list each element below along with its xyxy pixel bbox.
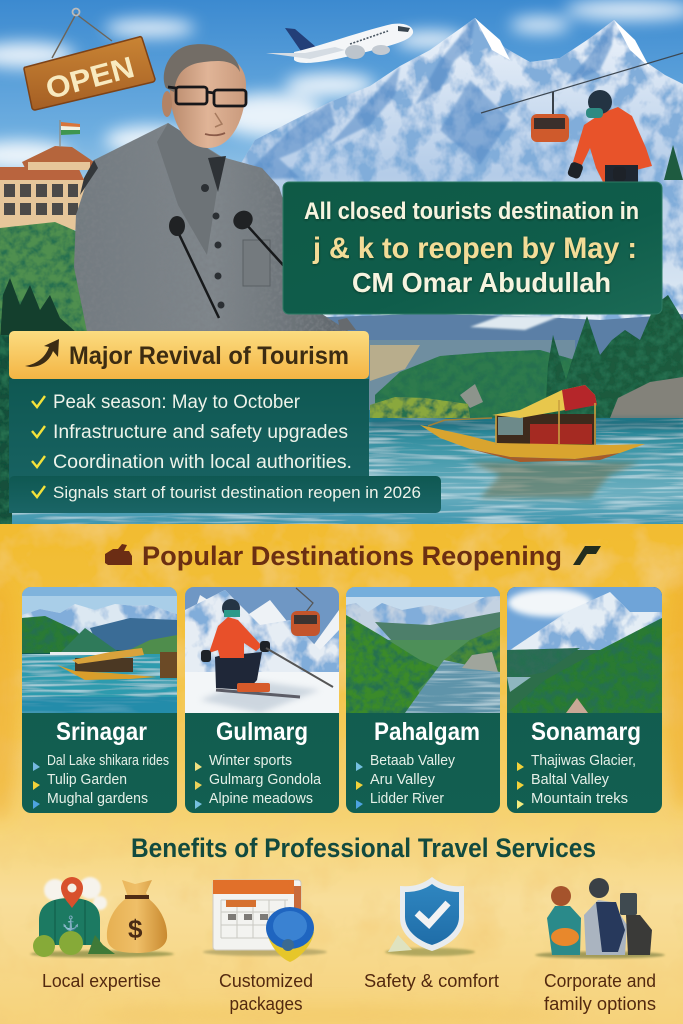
card: Srinagar: Srinagar bbox=[56, 718, 147, 746]
card: Sonamarg: Sonamarg bbox=[531, 718, 641, 746]
card: Srinagar bbox=[22, 587, 177, 813]
revival header bbox=[9, 331, 369, 379]
mountains bbox=[229, 18, 683, 330]
hero photo background bbox=[0, 0, 683, 524]
card: Sonamarg bbox=[507, 587, 662, 813]
microphones bbox=[169, 207, 322, 318]
lake bbox=[0, 418, 683, 524]
revival header: Major Revival of Tourism bbox=[69, 342, 349, 370]
card: Srinagar: Mughal gardens bbox=[47, 790, 148, 807]
card: Gulmarg: Winter sports bbox=[209, 752, 292, 769]
title text: CM Omar Abudullah bbox=[352, 267, 611, 298]
clouds bbox=[0, 0, 683, 169]
benefit: local expertise: Local expertise bbox=[42, 971, 161, 991]
speaker: man at podium bbox=[74, 44, 356, 332]
distant hills bbox=[300, 314, 683, 360]
benefit: corporate and family: Corporate and bbox=[544, 971, 656, 991]
title text: j & k to reopen by May : bbox=[312, 232, 637, 265]
skier bbox=[567, 90, 652, 182]
icon: rising arrow bbox=[25, 339, 59, 367]
icon: bags and pin: $ bbox=[128, 914, 143, 944]
sign text: OPEN bbox=[42, 51, 138, 106]
skier bbox=[201, 599, 333, 697]
shikara boat bbox=[420, 385, 645, 462]
card: Pahalgam: Aru Valley bbox=[370, 771, 435, 788]
tree bbox=[664, 145, 683, 180]
icon: calendar and badge bbox=[203, 880, 327, 962]
heading: benefits: Benefits of Professional Travel Services bbox=[131, 833, 596, 863]
card: Pahalgam bbox=[346, 587, 500, 813]
checklist: Signals start of tourist destination reopen in 2026 bbox=[53, 483, 421, 502]
card: Pahalgam: Lidder River bbox=[370, 790, 444, 807]
glasses bbox=[168, 87, 246, 106]
benefit: customized packages: packages bbox=[230, 994, 302, 1014]
left hillside forest bbox=[0, 222, 90, 524]
valley hillside bbox=[369, 340, 575, 410]
icon: shield bbox=[385, 877, 475, 956]
rock bbox=[610, 377, 683, 418]
card: Sonamarg: Baltal Valley bbox=[531, 771, 609, 788]
boat bbox=[57, 648, 177, 680]
title text: All closed tourists destination in bbox=[304, 198, 639, 225]
panel: major revival of tourism bbox=[9, 331, 441, 513]
card: Pahalgam: Betaab Valley bbox=[370, 752, 455, 769]
card: Sonamarg: Thajiwas Glacier, bbox=[531, 752, 636, 769]
open sign bbox=[24, 8, 155, 110]
checklist: Peak season: May to October bbox=[53, 392, 301, 413]
checklist: Coordination with local authorities. bbox=[53, 452, 352, 473]
benefit: customized packages: Customized bbox=[219, 971, 313, 991]
card: Srinagar: Dal Lake shikara rides bbox=[47, 752, 169, 769]
benefit: corporate and family: family options bbox=[544, 994, 656, 1014]
panel: yellow lower background bbox=[0, 524, 683, 1024]
sky bbox=[0, 0, 683, 240]
checklist: Infrastructure and safety upgrades bbox=[53, 422, 348, 443]
right forest bbox=[545, 295, 683, 418]
card: Srinagar: Tulip Garden bbox=[47, 771, 127, 788]
benefit: customized packages bbox=[203, 880, 327, 1014]
title panel bbox=[283, 182, 662, 314]
card: Gulmarg: Alpine meadows bbox=[209, 790, 313, 807]
card: Gulmarg: Gulmarg bbox=[216, 718, 308, 746]
benefit: safety and comfort bbox=[364, 877, 499, 991]
airplane bbox=[266, 24, 413, 63]
icon: luggage bbox=[105, 544, 132, 565]
icon: bags and pin: ⚓ bbox=[62, 915, 79, 932]
gondola bbox=[291, 588, 320, 636]
heading: popular destinations: Popular Destinations Reopening bbox=[142, 541, 562, 571]
card: Sonamarg: Mountain treks bbox=[531, 790, 628, 807]
shoreline flowers bbox=[370, 397, 470, 418]
benefit: corporate and family bbox=[535, 878, 665, 1014]
benefit: safety and comfort: Safety & comfort bbox=[364, 971, 499, 991]
benefit: local expertise bbox=[30, 877, 174, 991]
card: Gulmarg bbox=[185, 587, 339, 813]
icon: bags and pin bbox=[30, 877, 174, 958]
icon: pencil bbox=[573, 546, 601, 565]
title text bbox=[304, 198, 639, 298]
checklist bbox=[32, 392, 421, 502]
icon: travellers bbox=[535, 878, 665, 958]
card: Pahalgam: Pahalgam bbox=[374, 718, 480, 746]
building with flag bbox=[0, 120, 94, 230]
card: Gulmarg: Gulmarg Gondola bbox=[209, 771, 322, 788]
cable car bbox=[481, 53, 683, 142]
head bbox=[170, 52, 246, 148]
